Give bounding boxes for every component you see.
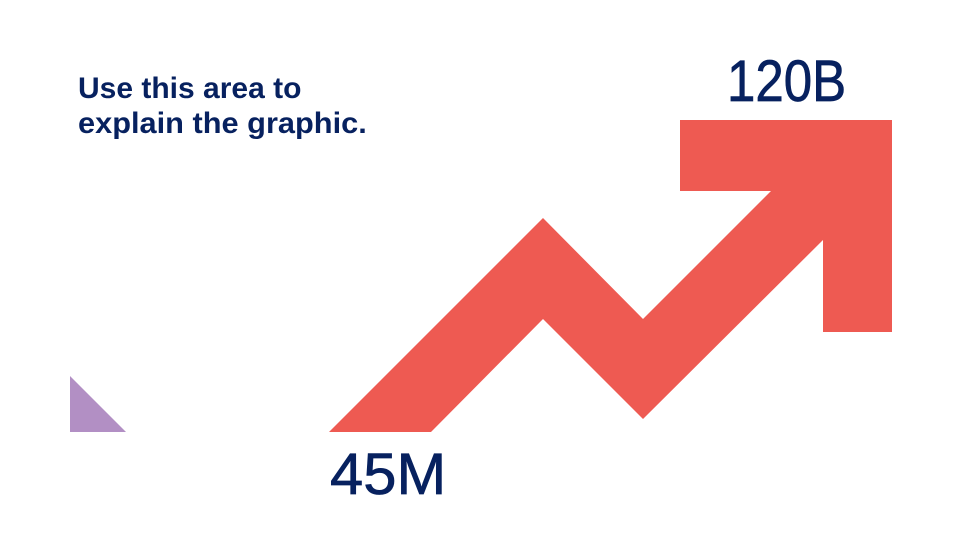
heading: explanation text (78, 72, 367, 140)
heading: explanation text: explain the graphic. (78, 107, 367, 140)
icon: purple triangle (70, 376, 126, 432)
heading: explanation text: Use this area to (78, 72, 301, 105)
label: end value 120B: 120B (727, 49, 846, 114)
label: start value 45M: 45M (330, 442, 446, 507)
